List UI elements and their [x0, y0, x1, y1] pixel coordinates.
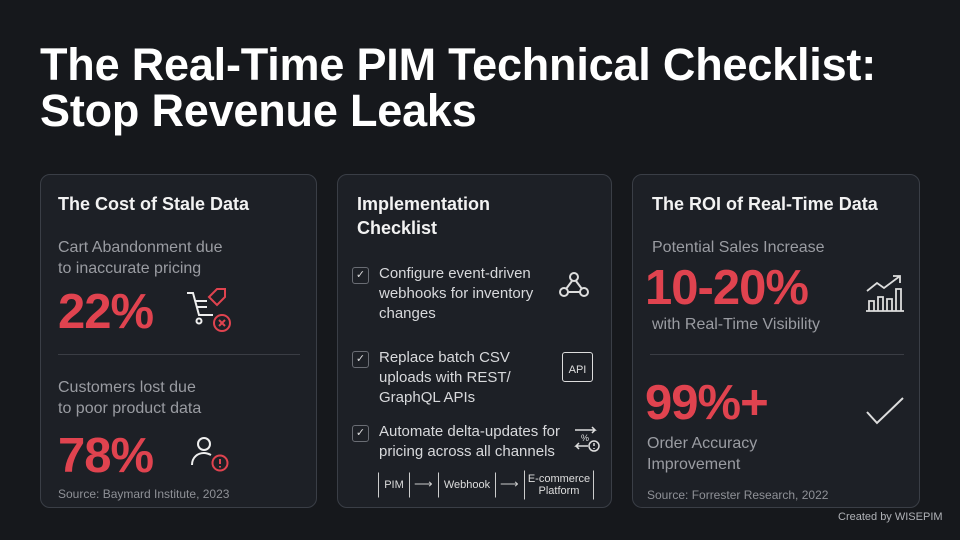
- icon: API window: [562, 352, 593, 382]
- item 3: Automate delta-updates for: [379, 423, 560, 440]
- icon: sync percent: [574, 426, 600, 452]
- item 3: [352, 423, 600, 460]
- flow diagram: Platform: [539, 485, 579, 497]
- text: cart abandonment: Cart Abandonment due: [58, 239, 223, 256]
- icon: checkmark: [866, 397, 904, 424]
- text: order accuracy: Improvement: [647, 456, 740, 473]
- flow diagram: PIM: [384, 479, 404, 491]
- stat: 22%: 22%: [58, 285, 153, 339]
- heading: checklist: Checklist: [357, 218, 437, 238]
- icon: API window: API: [569, 364, 586, 376]
- title: [40, 39, 876, 136]
- credit: Created by WISEPIM: [838, 511, 943, 523]
- icon: cart with tag: [187, 288, 231, 332]
- item 2: ✓: [356, 353, 365, 365]
- flow diagram: Webhook: [444, 479, 490, 491]
- text: order accuracy: [647, 435, 758, 473]
- text: order accuracy: Order Accuracy: [647, 435, 757, 452]
- stat: 99%+: 99%+: [645, 376, 768, 430]
- heading: checklist: Implementation: [357, 194, 490, 214]
- text: cart abandonment: [58, 239, 223, 277]
- flow diagram: ⟶: [500, 476, 519, 491]
- source: Source: Baymard Institute, 2023: [58, 487, 229, 501]
- text: customers lost: to poor product data: [58, 400, 201, 417]
- flow diagram: [378, 470, 594, 500]
- text: potential sales: Potential Sales Increase: [652, 239, 825, 256]
- icon: sync percent: %: [581, 433, 589, 443]
- item 1: ✓: [356, 269, 365, 281]
- heading: checklist: [357, 194, 490, 238]
- heading: cost: The Cost of Stale Data: [58, 194, 249, 214]
- item 1: Configure event-driven: [379, 265, 531, 282]
- item 3: ✓: [356, 427, 365, 439]
- item 2: [352, 349, 593, 406]
- text: customers lost: Customers lost due: [58, 379, 196, 396]
- panel: ROI: [632, 174, 920, 508]
- item 1: changes: [379, 305, 436, 322]
- title: Stop Revenue Leaks: [40, 85, 477, 136]
- text: visibility: with Real-Time Visibility: [652, 316, 820, 333]
- stat: 78%: 78%: [58, 429, 153, 483]
- icon: user with alert: [191, 437, 228, 472]
- flow diagram: ⟶: [414, 476, 433, 491]
- flow diagram: E-commerce: [528, 473, 590, 485]
- item 1: webhooks for inventory: [379, 285, 533, 302]
- heading: ROI: The ROI of Real-Time Data: [652, 194, 878, 214]
- item 2: GraphQL APIs: [379, 389, 475, 406]
- item 3: pricing across all channels: [379, 443, 555, 460]
- item 1: [352, 265, 589, 322]
- source: Source: Forrester Research, 2022: [647, 488, 828, 502]
- item 2: Replace batch CSV: [379, 349, 510, 366]
- stat: 10-20%: 10-20%: [645, 261, 808, 315]
- item 2: uploads with REST/: [379, 369, 511, 386]
- text: cart abandonment: to inaccurate pricing: [58, 260, 201, 277]
- panel: cost of stale data: [40, 174, 317, 508]
- icon: webhook: [559, 272, 589, 297]
- icon: bar chart up: [866, 275, 904, 312]
- text: customers lost: [58, 379, 202, 417]
- panel: implementation checklist: [337, 174, 612, 508]
- title: The Real-Time PIM Technical Checklist:: [40, 39, 876, 90]
